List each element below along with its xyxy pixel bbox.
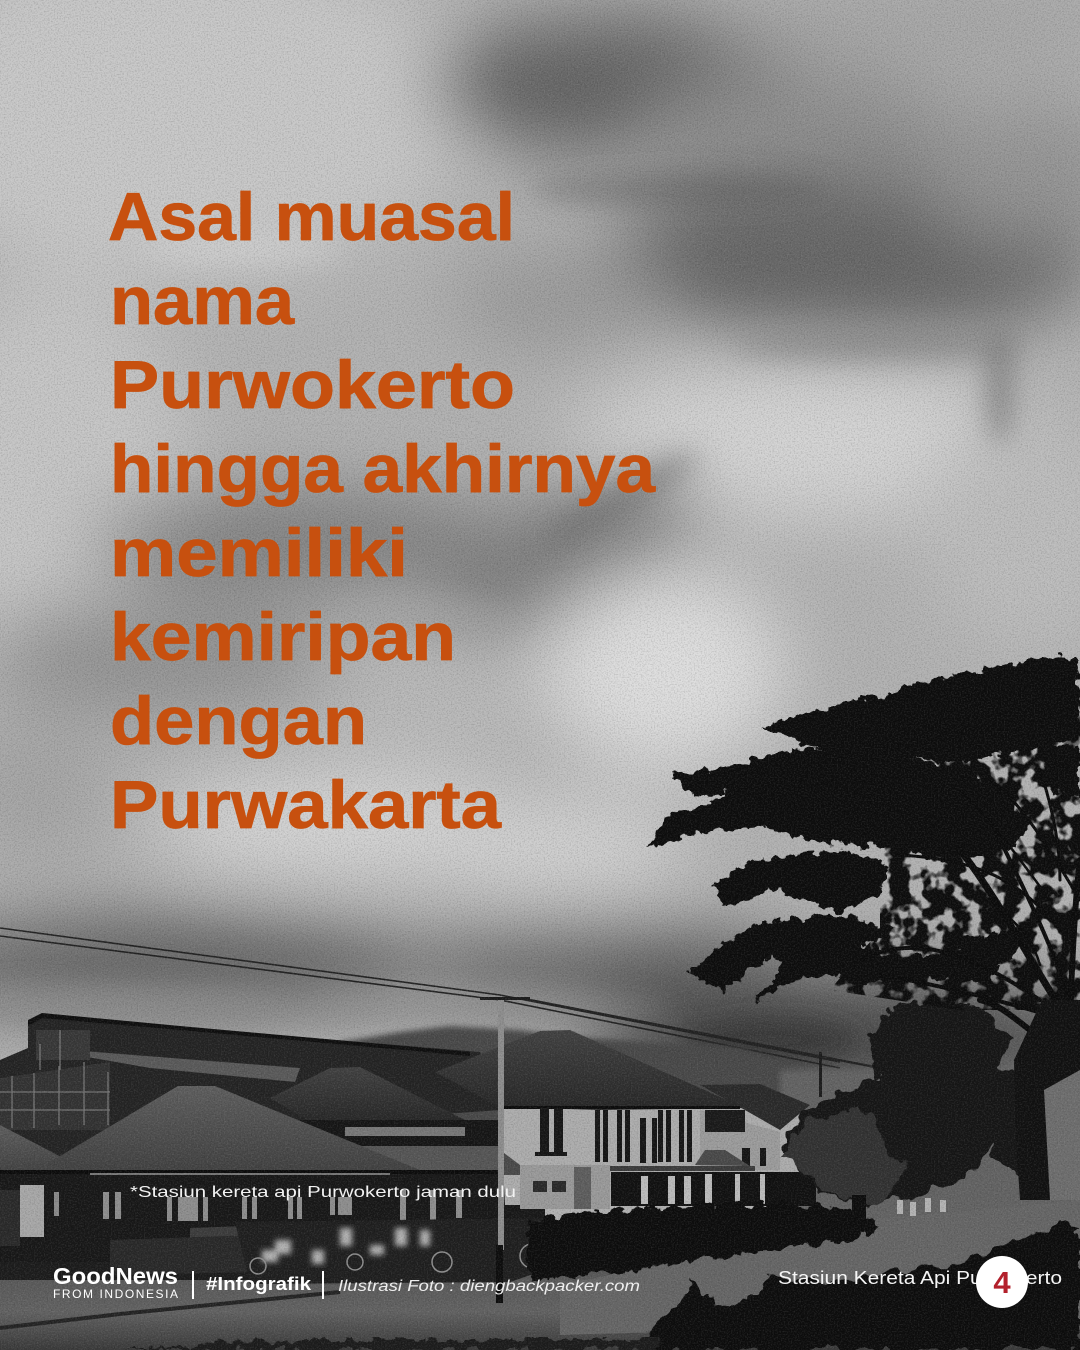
row of parked carriages and shadow (528, 1203, 880, 1280)
photo credit: Ilustrasi Foto : diengbackpacker.com (338, 1278, 640, 1295)
title: nama (110, 263, 295, 339)
page number badge: 4 (993, 1265, 1011, 1300)
hashtag: #Infografik (206, 1274, 312, 1294)
white two-storey building (435, 1030, 816, 1209)
station wall (0, 1170, 545, 1265)
title (108, 179, 656, 843)
title: Asal muasal (108, 179, 515, 255)
mottled inner crown (820, 700, 1080, 1010)
soft cloud streaks (0, 172, 1030, 1062)
logo: GoodNews from Indonesia: GoodNews (53, 1263, 178, 1289)
title: memiliki (110, 515, 408, 591)
divider (192, 1271, 194, 1299)
location label: Stasiun Kereta Api Purwokerto (778, 1268, 1062, 1288)
logo: GoodNews from Indonesia (53, 1263, 178, 1301)
long workshop shed (0, 1013, 500, 1170)
page number badge (976, 1256, 1028, 1308)
pedicabs and riders on forecourt (0, 1218, 545, 1284)
title: Purwokerto (110, 347, 515, 423)
title: dengan (110, 683, 367, 759)
title: Purwakarta (110, 767, 502, 843)
logo: GoodNews from Indonesia: FROM INDONESIA (53, 1287, 178, 1301)
foreground bushes (640, 1220, 1080, 1350)
distant mountains (340, 1026, 860, 1130)
small distant figures (897, 1198, 946, 1216)
forecourt fence rail (0, 1292, 340, 1328)
ground (0, 1240, 1080, 1350)
divider (322, 1271, 324, 1299)
photo caption: *Stasiun kereta api Purwokerto jaman dulu (130, 1184, 516, 1201)
power lines (0, 928, 880, 1068)
lower tree canopy (780, 1000, 1060, 1205)
grass clearing at the right (560, 1200, 1080, 1335)
forecourt shadow (120, 1338, 660, 1350)
tree trunk (1014, 1000, 1080, 1200)
tree branches (860, 770, 1080, 1030)
tiled roofs (0, 1067, 540, 1175)
hazy background behind lower trees (780, 1070, 1080, 1235)
utility pole (480, 997, 822, 1303)
large rain tree (648, 657, 1080, 1200)
title: hingga akhirnya (110, 431, 656, 507)
title: kemiripan (110, 599, 456, 675)
